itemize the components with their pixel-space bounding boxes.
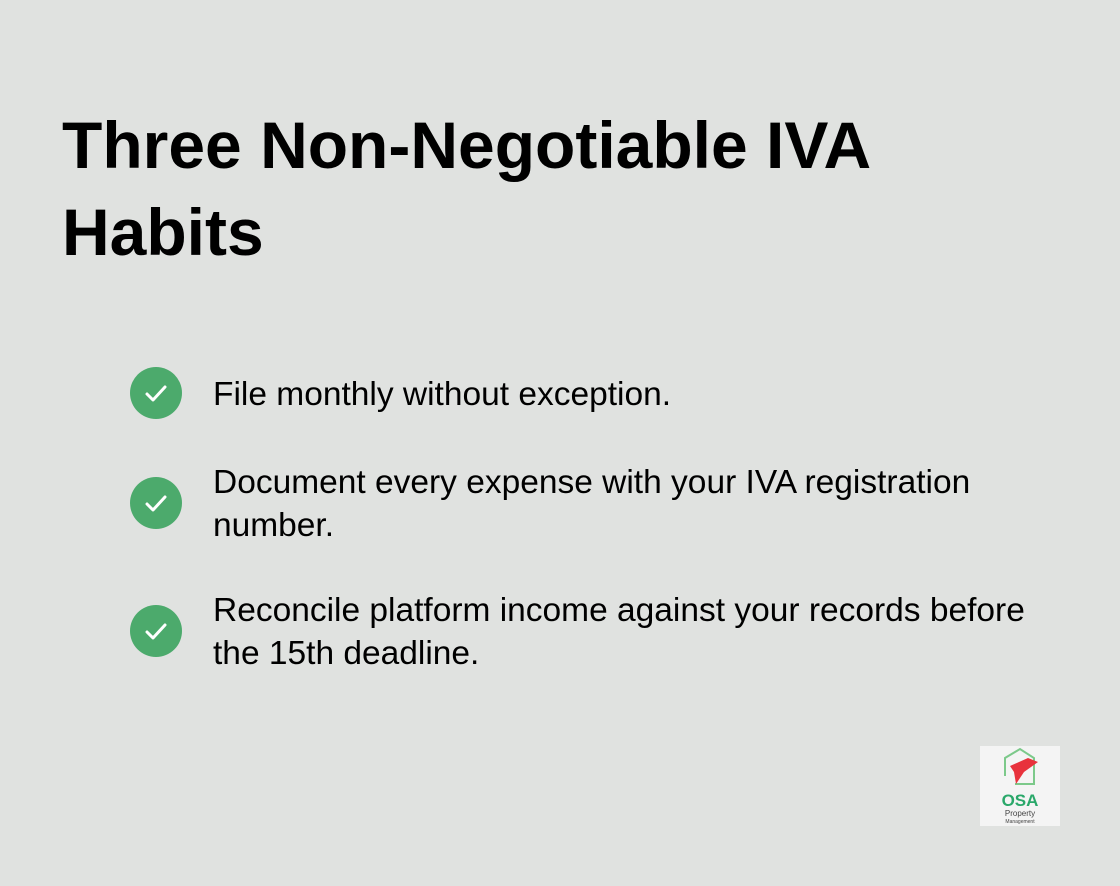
- logo: Management: [1005, 819, 1035, 825]
- logo: OSA: [1002, 791, 1038, 810]
- text: Reconcile platform income against your records before the 15th deadline.: [213, 592, 1025, 672]
- logo: [980, 746, 1060, 826]
- text: Document every expense with your IVA registration number.: [213, 464, 970, 544]
- item 1: [130, 367, 671, 419]
- icon: check: [130, 605, 182, 657]
- title: Three Non-Negotiable IVA Habits: [62, 108, 869, 269]
- item 2: [130, 464, 970, 544]
- logo: Property: [1005, 809, 1035, 818]
- icon: check: [130, 367, 182, 419]
- icon: check: [130, 477, 182, 529]
- item 3: [130, 592, 1025, 672]
- text: File monthly without exception.: [213, 376, 671, 413]
